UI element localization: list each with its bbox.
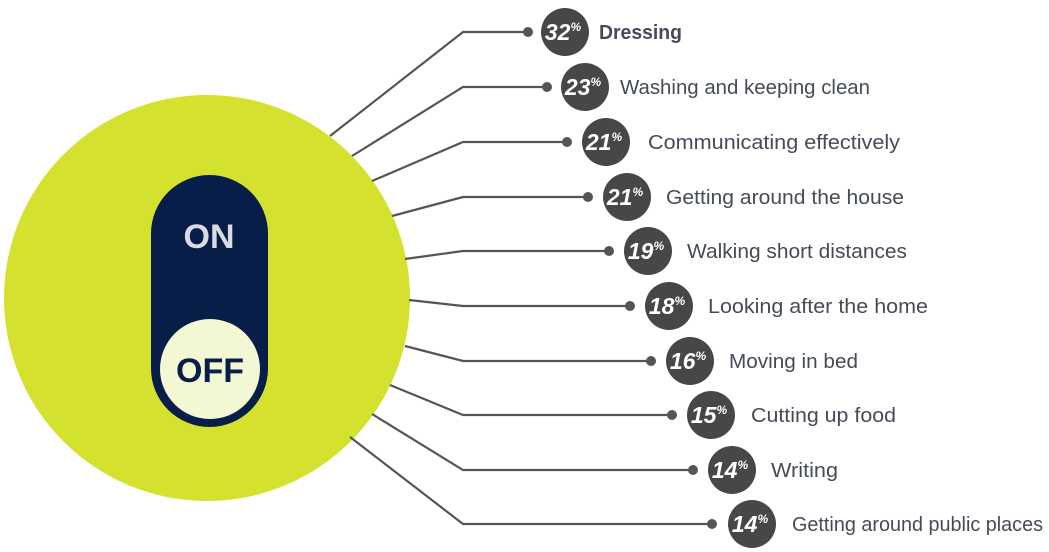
item: 21% Getting around house: % [632, 185, 643, 199]
item: 16% Moving in bed: 16 [670, 348, 695, 374]
item: 21% Communicating: 21 [586, 129, 611, 155]
item: 18% Looking after home: Looking after the home [708, 296, 928, 318]
item: 18% Looking after home: % [674, 294, 685, 308]
circle: lime background [4, 95, 410, 501]
item: 19% Walking: Walking short distances [687, 241, 907, 263]
dots [523, 27, 717, 529]
item: 23% Washing [561, 63, 870, 111]
item: 23% Washing: % [590, 75, 601, 89]
item: 32% Dressing: Dressing [599, 22, 682, 44]
text: ON: ON [184, 218, 234, 256]
item: 18% Looking after home [645, 282, 928, 330]
item: 21% Getting around house [603, 173, 904, 221]
item: 14% Public places: % [757, 512, 768, 526]
knob: OFF: OFF [176, 352, 244, 390]
item: 32% Dressing [541, 8, 682, 56]
item: 15% Cutting up food: 15 [691, 402, 716, 428]
item: 21% Communicating: Communicating effectively [648, 132, 900, 154]
item: 23% Washing: Washing and keeping clean [620, 77, 870, 99]
knob: OFF [160, 319, 260, 419]
item: 21% Communicating [582, 118, 900, 166]
item: 16% Moving in bed: Moving in bed [729, 351, 858, 373]
item: 19% Walking: % [653, 239, 664, 253]
item: 32% Dressing: % [570, 20, 581, 34]
item: 19% Walking [624, 227, 907, 275]
item: 14% Writing [708, 446, 838, 494]
item: 16% Moving in bed [666, 337, 858, 385]
item: 14% Writing: % [737, 458, 748, 472]
toggle switch [151, 175, 268, 427]
item: 19% Walking: 19 [628, 238, 653, 264]
item: 21% Getting around house: 21 [607, 184, 632, 210]
item: 23% Washing: 23 [565, 74, 590, 100]
item: 15% Cutting up food: % [716, 403, 727, 417]
item: 14% Writing: 14 [712, 457, 737, 483]
item: 16% Moving in bed: % [695, 349, 706, 363]
item: 14% Public places [728, 500, 1043, 548]
item: 32% Dressing: 32 [545, 19, 570, 45]
item: 14% Public places: Getting around public places [792, 514, 1043, 536]
item: 15% Cutting up food: Cutting up food [751, 405, 896, 427]
item: 14% Writing: Writing [771, 460, 838, 482]
item: 15% Cutting up food [687, 391, 896, 439]
item: 21% Getting around house: Getting around the house [666, 187, 904, 209]
connector lines [330, 32, 712, 524]
item: 21% Communicating: % [611, 130, 622, 144]
item: 14% Public places: 14 [732, 511, 757, 537]
item: 18% Looking after home: 18 [649, 293, 674, 319]
